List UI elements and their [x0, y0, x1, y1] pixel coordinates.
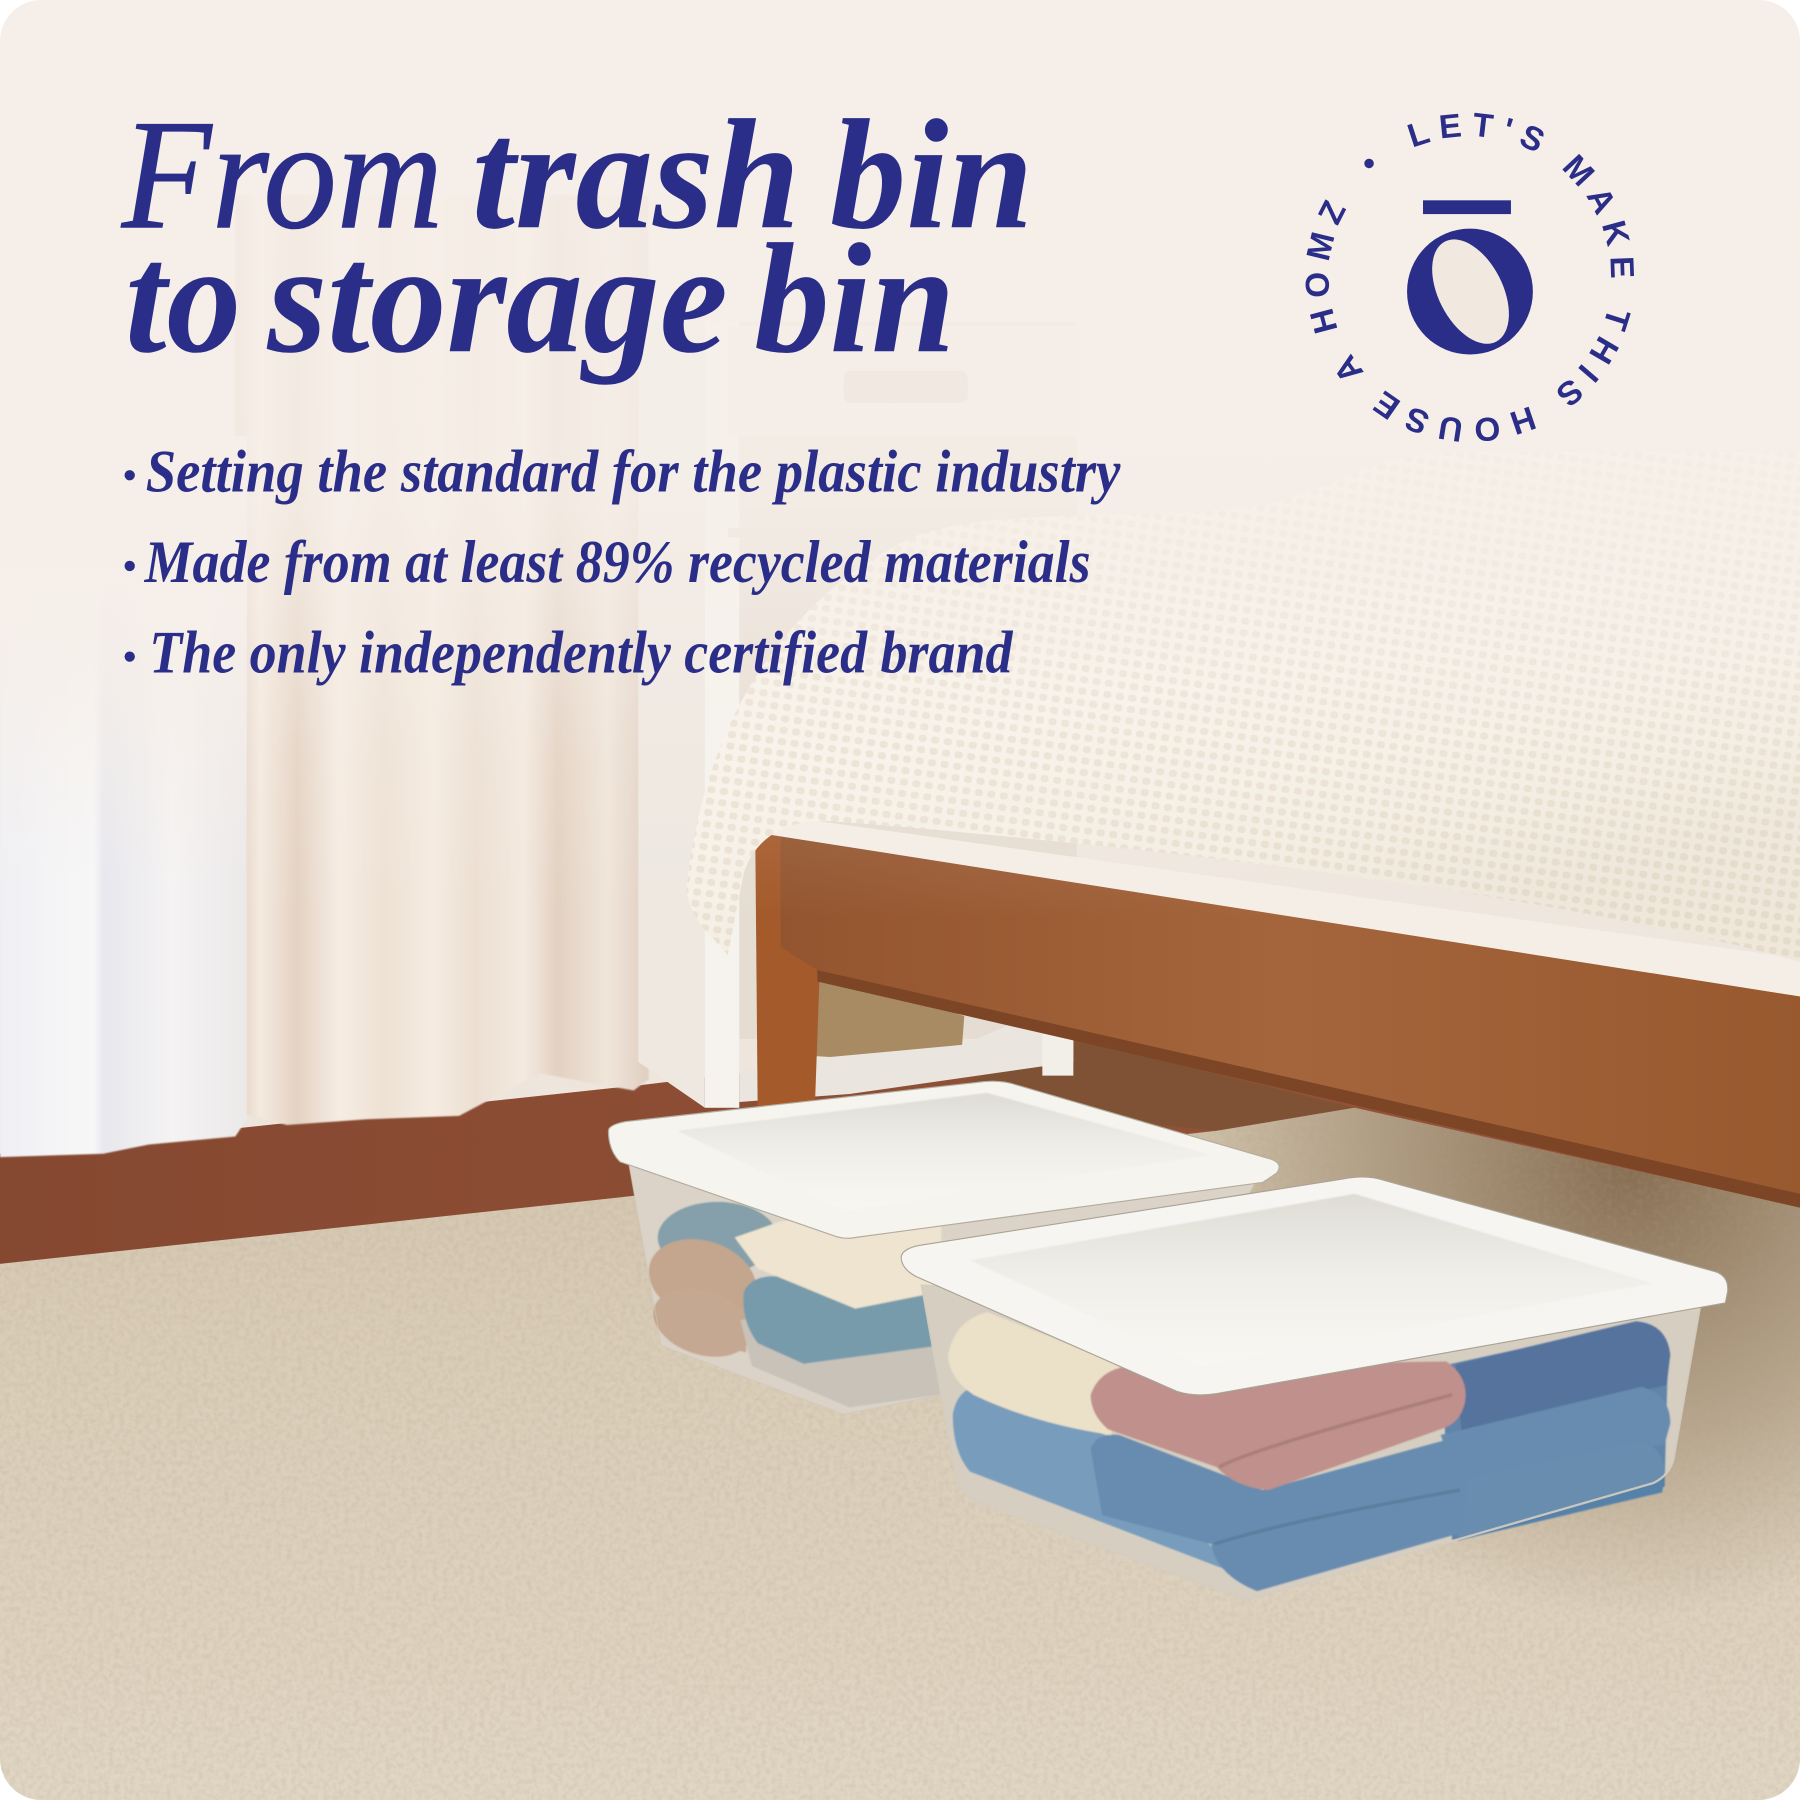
- back bin lid inset: [677, 1093, 1211, 1211]
- back bin lid: [608, 1081, 1279, 1238]
- bed side rail: [781, 835, 1800, 1208]
- rug: [0, 1108, 1800, 1800]
- logo bar: [1423, 200, 1511, 214]
- blue fold: [1215, 1490, 1460, 1544]
- bullet 2: Made from at least 89% recycled materials: [144, 529, 1091, 596]
- white nightstand: [638, 529, 1076, 1108]
- front bin lid: [901, 1177, 1728, 1395]
- shelf right post: [1042, 1034, 1074, 1076]
- rug texture: [0, 1102, 1800, 1800]
- back bin contents: [638, 1202, 947, 1407]
- lower blue towel: [1452, 1441, 1665, 1541]
- back storage bin: [608, 1081, 1279, 1414]
- logo ring mark: [1407, 229, 1533, 354]
- dark floor beneath the bed: [966, 1040, 1354, 1130]
- circular badge logo: [1306, 112, 1634, 442]
- back bin backing: [629, 1165, 1263, 1414]
- headline: bin: [830, 88, 1033, 262]
- front bin backing: [922, 1286, 1701, 1598]
- headline: trash: [472, 88, 800, 262]
- rug shadow under the bed: [1148, 1102, 1800, 1642]
- left blue towel: [953, 1386, 1234, 1573]
- bullet 1: Setting the standard for the plastic industry: [146, 438, 1121, 505]
- navy towel: [1458, 1324, 1668, 1429]
- nightstand back interior: [740, 624, 1076, 1039]
- bullet list: [125, 438, 1121, 687]
- beige curtain: [247, 522, 649, 1126]
- big blue towel: [1091, 1435, 1466, 1591]
- mauve towel: [1091, 1361, 1466, 1490]
- drawer edge: [728, 532, 739, 537]
- mid blue towel: [1441, 1387, 1670, 1481]
- waffle blanket: [686, 452, 1800, 962]
- nightstand front post: [704, 540, 740, 1108]
- bed frame: [755, 835, 1800, 1208]
- right towel stack underlay: [1441, 1324, 1668, 1541]
- headline: storage: [266, 212, 728, 386]
- front bin contents: [948, 1312, 1670, 1591]
- circular slogan text: LET'S MAKE THIS HOUSE A HOMZ •: [1306, 112, 1634, 442]
- lower shelf: [739, 1024, 1073, 1102]
- headline: From: [121, 88, 443, 262]
- front bin frosted body: [922, 1286, 1701, 1598]
- bed leg: [755, 835, 820, 1107]
- mauve fold: [1219, 1395, 1452, 1467]
- nightstand side panel: [638, 529, 705, 1108]
- front storage bin: [901, 1177, 1728, 1598]
- headline: bin: [754, 212, 955, 386]
- white sheet band: [769, 817, 1800, 996]
- back bin frosted body: [629, 1165, 1263, 1414]
- front bin lid inset: [970, 1194, 1653, 1366]
- drawer handle: [844, 371, 968, 403]
- wood floor: [0, 1060, 1799, 1264]
- basket on shelf: [816, 982, 964, 1057]
- sheer white curtain: [0, 659, 247, 1158]
- headline: to: [125, 212, 241, 386]
- logo ellipse cutout: [1416, 227, 1525, 356]
- headline: [121, 88, 1033, 386]
- bullet 3: The only independently certified brand: [149, 620, 1014, 687]
- cream towel: [948, 1312, 1119, 1435]
- blanket shading: [686, 452, 1800, 962]
- sheer curtain top fade: [0, 436, 247, 872]
- top wash overlay: [0, 0, 1800, 918]
- bed rail lower edge shadow: [817, 970, 1800, 1208]
- wall: [0, 798, 1800, 1154]
- drawer: [728, 326, 1078, 436]
